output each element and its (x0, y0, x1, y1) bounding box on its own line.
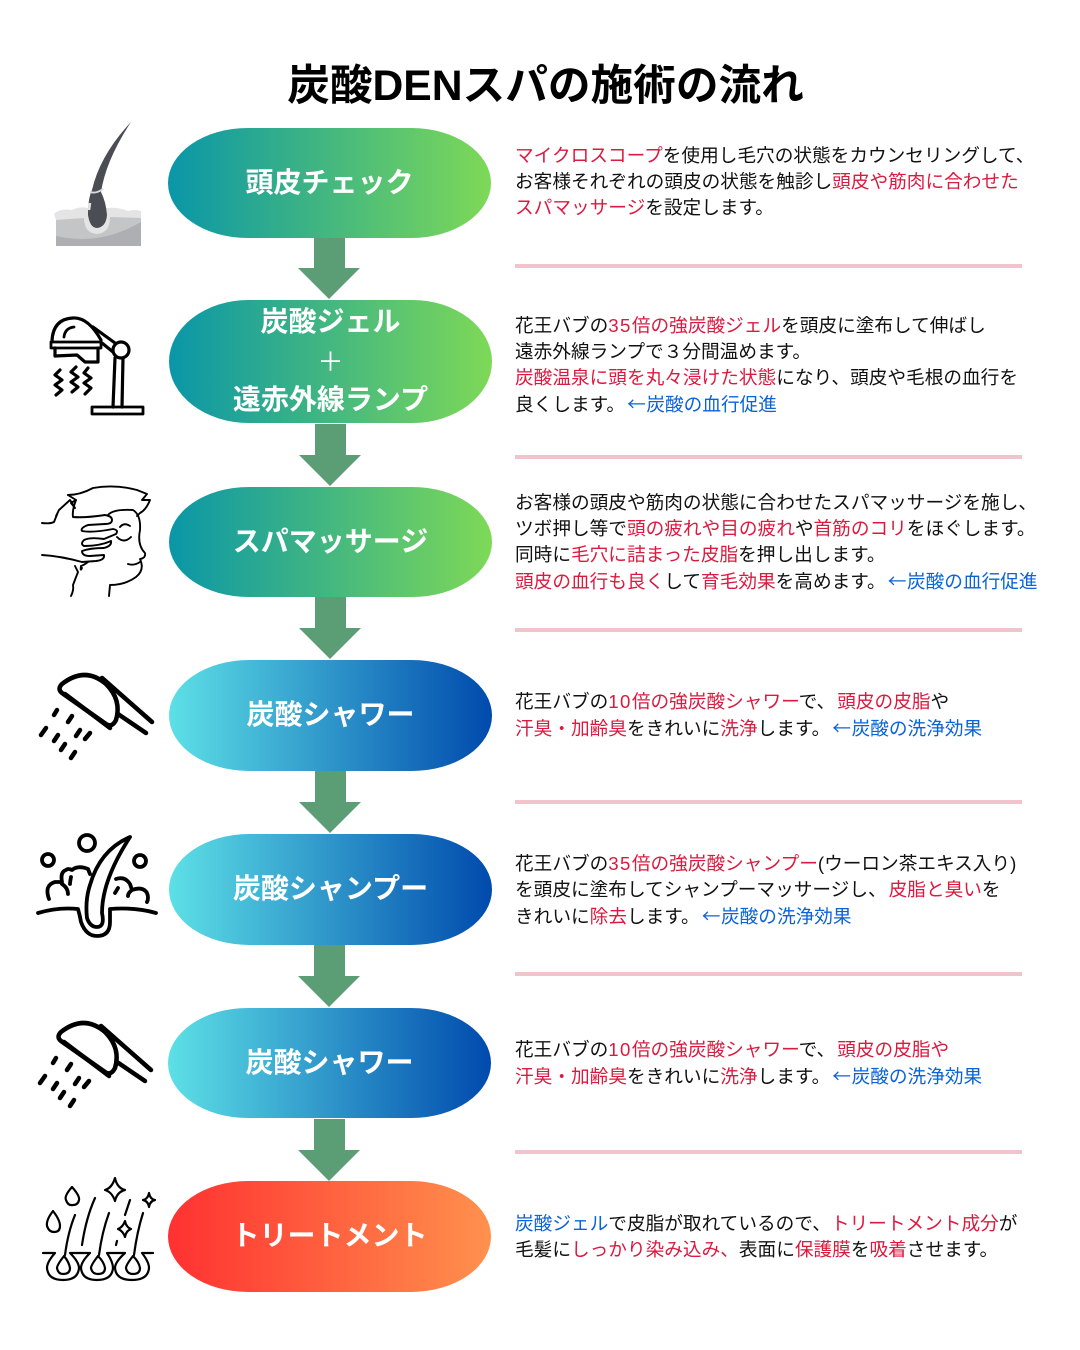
text: step 1 description: マイクロスコープを使用し毛穴の状態をカウンセリングして、 (515, 145, 1034, 166)
text: step 5 description: を頭皮に塗布してシャンプーマッサージし、皮脂と臭いを (515, 879, 1001, 900)
pill: carbonated shampoo (169, 834, 492, 945)
text: step 5 description (515, 853, 1016, 929)
pill: scalp check: 頭皮チェック (245, 167, 414, 198)
text: step 6 description: 汗臭・加齢臭をきれいに洗浄します。←炭酸の洗浄効果 (515, 1062, 982, 1089)
pill: carbonated shower (169, 660, 492, 771)
text: step 1 description: お客様それぞれの頭皮の状態を触診し頭皮や筋肉に合わせた (515, 171, 1019, 192)
icon: shower head (41, 675, 152, 758)
text: step 2 description: 遠赤外線ランプで３分間温めます。 (515, 341, 811, 362)
text: step 6 description: 花王バブの10倍の強炭酸シャワーで、頭皮の皮脂や (515, 1039, 949, 1060)
text: step 7 description: 毛髪にしっかり染み込み、表面に保護膜を吸着させます。 (515, 1239, 998, 1260)
arrow 2 (299, 424, 361, 486)
text: step 5 description: 花王バブの35倍の強炭酸シャンプー(ウーロン茶エキス入り) (515, 853, 1016, 874)
pill: treatment (168, 1181, 491, 1292)
pill: carbonated gel and far infrared lamp: 炭酸ジェル (260, 306, 400, 337)
pill: spa massage: スパマッサージ (233, 526, 428, 557)
pill: carbonated gel and far infrared lamp (169, 300, 492, 423)
pill: scalp check (168, 128, 491, 238)
icon: far infrared lamp (51, 318, 143, 414)
text: step 1 description: スパマッサージを設定します。 (515, 197, 774, 218)
pill: carbonated gel and far infrared lamp: 遠赤外線ランプ (233, 384, 428, 415)
icon: head massage (42, 486, 150, 596)
pill: spa massage (169, 487, 492, 597)
pill: treatment: トリートメント (231, 1220, 428, 1251)
arrow 1 (298, 238, 360, 299)
text: step 4 description (515, 691, 982, 741)
pill: carbonated shampoo: 炭酸シャンプー (233, 873, 428, 904)
text: step 4 description: 花王バブの10倍の強炭酸シャワーで、頭皮の皮脂や (515, 691, 949, 712)
arrow 4 (299, 771, 361, 833)
icon: shower head repeat (40, 1023, 151, 1106)
pill: carbonated shower second: 炭酸シャワー (245, 1047, 414, 1078)
text: step 6 description (515, 1039, 982, 1089)
arrow 6 (298, 1119, 360, 1181)
text: step 5 description: きれいに除去します。←炭酸の洗浄効果 (515, 902, 852, 929)
text: step 3 description: お客様の頭皮や筋肉の状態に合わせたスパマッサージを施し、 (515, 492, 1037, 513)
text: step 2 description (515, 315, 1018, 417)
text: step 2 description: 炭酸温泉に頭を丸々浸けた状態になり、頭皮や毛根の血行を (515, 367, 1018, 388)
text: step 2 description: 花王バブの35倍の強炭酸ジェルを頭皮に塗布して伸ばし (515, 315, 986, 336)
icon: hair follicle in skin (54, 122, 141, 246)
text: step 4 description: 汗臭・加齢臭をきれいに洗浄します。←炭酸の洗浄効果 (515, 714, 982, 741)
text: step 2 description: 良くします。←炭酸の血行促進 (515, 390, 777, 417)
text: step 3 description (515, 492, 1038, 594)
text: step 3 description: ツボ押し等で頭の疲れや目の疲れや首筋のコリをほぐします。 (515, 518, 1036, 539)
pill: carbonated shower second (168, 1008, 491, 1118)
text: step 3 description: 頭皮の血行も良くして育毛効果を高めます。←炭酸の血行促進 (515, 567, 1038, 594)
arrow 5 (298, 945, 360, 1007)
text: step 7 description: 炭酸ジェルで皮脂が取れているので、トリートメント成分が (515, 1213, 1017, 1234)
icon: shampoo foam on hair (38, 835, 156, 936)
text: step 7 description (515, 1213, 1017, 1260)
icon: treatment hair with sparkles (43, 1178, 155, 1280)
title: 炭酸DENスパの施術の流れ (287, 62, 804, 110)
text: step 1 description (515, 145, 1034, 218)
pill: carbonated gel and far infrared lamp: ＋ (317, 342, 344, 379)
pill: carbonated shower: 炭酸シャワー (246, 699, 414, 730)
text: step 3 description: 同時に毛穴に詰まった皮脂を押し出します。 (515, 544, 886, 565)
arrow 3 (299, 597, 361, 659)
